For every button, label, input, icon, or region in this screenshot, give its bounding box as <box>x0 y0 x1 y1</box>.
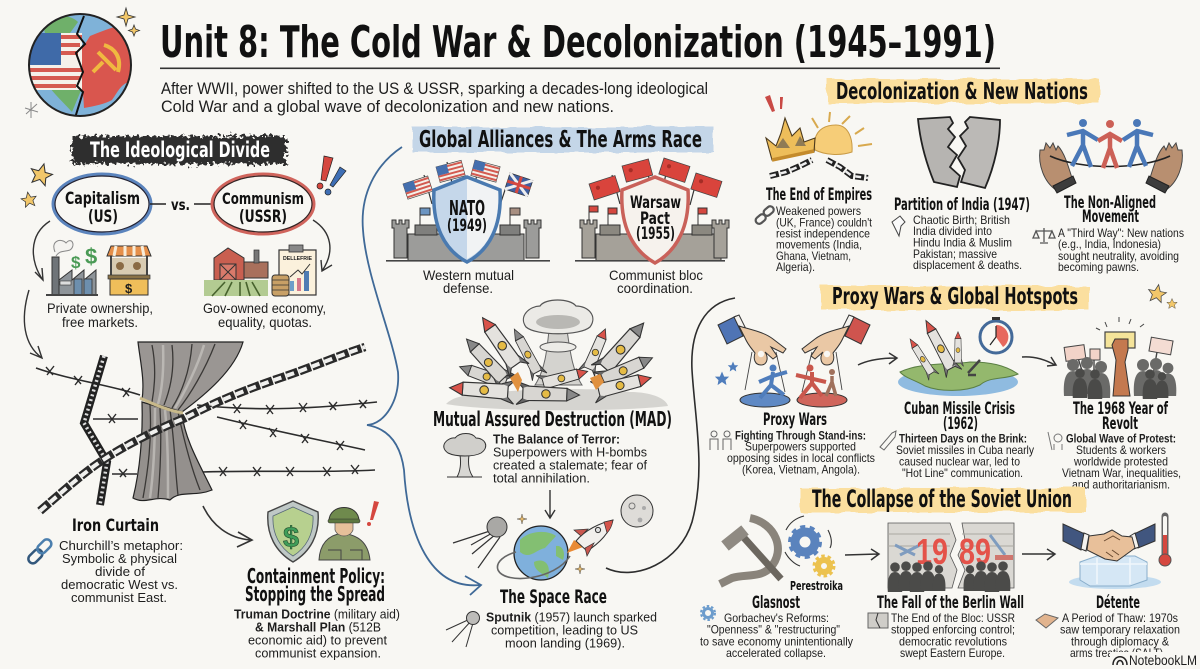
glasnost text: "Openness" & "restructuring" <box>707 622 840 636</box>
capitalism description <box>47 300 153 330</box>
partition text: displacement & deaths. <box>913 258 1022 272</box>
detente text: through diplomacy & <box>1071 634 1169 648</box>
icon: market stall: $ <box>125 281 133 296</box>
MAD text <box>493 432 647 486</box>
heading: MAD: Mutual Assured Destruction (MAD) <box>433 407 672 431</box>
icon: shield with dollar: $ <box>283 522 299 554</box>
containment text: economic aid) to prevent <box>248 632 387 648</box>
MAD text: The Balance of Terror: <box>493 432 620 446</box>
end of empires text: Weakened powers <box>776 204 861 218</box>
arrow: black brace to proxy wars and space race <box>606 298 735 572</box>
illustration: hammer and sickle <box>720 518 781 584</box>
capitalism oval: Capitalism <box>65 189 140 209</box>
icon: mushroom cloud <box>444 434 486 477</box>
icon: shield with dollar <box>268 501 318 562</box>
communism description <box>203 300 326 330</box>
panel: the ideological divide <box>20 136 346 358</box>
partition text: India divided into <box>913 224 992 238</box>
heading: end of empires: The End of Empires <box>766 185 872 205</box>
containment text <box>234 606 400 660</box>
cuban missile text: "Hot Line" communication. <box>902 466 1023 480</box>
communism description: equality, quotas. <box>218 314 312 330</box>
arrow head <box>237 532 252 547</box>
detente text: A Period of Thaw: 1970s <box>1062 611 1178 625</box>
heading: collapse: The Collapse of the Soviet Union <box>812 485 1072 513</box>
non-aligned text: sought neutrality, avoiding <box>1058 249 1179 263</box>
illustration: berlin wall 1989: 19 <box>916 531 948 572</box>
cuban missile text <box>896 432 1034 480</box>
warsaw pact group <box>575 158 729 296</box>
communism oval: (USSR) <box>239 207 287 227</box>
icon: clipboard chart and coins <box>272 245 316 296</box>
panel: global alliances and arms race <box>386 127 729 650</box>
end of empires text: resist independence <box>776 226 870 240</box>
illustration: end of empires <box>765 95 872 178</box>
end of empires text: (UK, France) couldn't <box>776 216 873 230</box>
heading: 1968 <box>1073 399 1168 434</box>
detente text: arms treaties (SALT). <box>1070 646 1166 660</box>
nato group <box>386 160 550 296</box>
non-aligned text <box>1058 226 1184 274</box>
earth <box>497 526 570 580</box>
shield: nato: (1949) <box>447 216 487 236</box>
MAD text: total annihilation. <box>493 470 590 486</box>
castle: nato <box>386 208 550 262</box>
panel: collapse of the soviet union <box>700 485 1180 660</box>
1968 text: worldwide protested <box>1073 454 1168 468</box>
versus label: vs. <box>171 196 190 214</box>
heading: berlin wall: The Fall of the Berlin Wall <box>877 593 1024 613</box>
icon: stars <box>1147 283 1177 308</box>
iron curtain text: Symbolic & physical <box>62 551 177 566</box>
illustration: 1968 protest <box>1064 317 1176 399</box>
1968 text: Global Wave of Protest: <box>1066 432 1176 446</box>
heading: decolonization: Decolonization & New Nations <box>836 79 1088 105</box>
icon: handshake <box>1036 614 1058 628</box>
label: perestroika: Perestroika <box>790 579 843 593</box>
icon: split globe <box>25 8 140 118</box>
berlin wall text: democratic revolutions <box>899 634 1007 648</box>
partition text: Chaotic Birth; British <box>913 213 1010 227</box>
icon: broken chain <box>754 205 775 225</box>
heading: 1968: Revolt <box>1102 414 1138 434</box>
space race text: competition, leading to US <box>491 622 638 638</box>
arrow: cuba to 1968 <box>1022 357 1056 366</box>
icon: scales <box>1033 228 1055 243</box>
icon: market stall <box>107 246 151 296</box>
heading: containment policy: Stopping the Spread <box>245 582 385 606</box>
fence post <box>84 356 107 505</box>
iron curtain text: democratic West vs. <box>61 577 178 592</box>
partition text: Hindu India & Muslim <box>913 236 1012 250</box>
heading: partition of india: Partition of India (1947) <box>894 195 1030 215</box>
shield: warsaw pact: Pact <box>640 209 670 229</box>
space race text: Sputnik (1957) launch sparked <box>486 610 657 624</box>
arrow head <box>30 346 42 358</box>
heading: iron curtain: Iron Curtain <box>72 516 159 536</box>
1968 text <box>1062 432 1181 492</box>
proxy wars text: Fighting Through Stand-ins: <box>735 428 866 442</box>
intro text <box>161 80 708 116</box>
nato description: Western mutual <box>423 267 514 283</box>
icon: gear <box>701 606 715 620</box>
partition text: Pakistan; massive <box>913 247 997 261</box>
heading: cuban missile crisis <box>904 399 1015 434</box>
proxy wars text: Superpowers supported <box>745 440 856 454</box>
heading: containment policy: Containment Policy: <box>247 564 385 588</box>
heading: non-aligned movement: Movement <box>1082 207 1139 227</box>
rocket <box>567 520 613 556</box>
nato description: defense. <box>443 280 493 296</box>
arrow head <box>35 268 43 280</box>
panel: containment policy <box>234 501 400 660</box>
warsaw pact description <box>609 267 703 296</box>
detente text <box>1060 611 1180 660</box>
panel: iron curtain <box>27 342 377 605</box>
icon: india map <box>892 216 905 236</box>
badge: notebooklm <box>1110 652 1200 669</box>
capitalism oval: (US) <box>88 207 118 227</box>
partition text <box>913 213 1022 272</box>
icon: barn and field <box>204 248 268 296</box>
heading: cuban missile crisis: (1962) <box>943 414 978 434</box>
illustration: berlin wall 1989: 89 <box>959 531 991 572</box>
glasnost text: accelerated collapse. <box>726 646 826 660</box>
illustration: non-aligned movement <box>1040 119 1182 193</box>
icon: exclamation marks <box>317 156 346 195</box>
1968 text: Students & workers <box>1076 443 1166 457</box>
heading: collapse <box>800 485 1086 513</box>
capitalism oval <box>53 174 151 234</box>
non-aligned text: becoming pawns. <box>1058 260 1139 274</box>
space race text: moon landing (1969). <box>505 636 625 650</box>
panel: decolonization and new nations <box>754 79 1184 274</box>
communism oval <box>212 174 314 234</box>
containment text: communist expansion. <box>255 646 381 660</box>
icon: factory and dollars <box>46 240 98 296</box>
icon: chain link <box>27 538 53 565</box>
sparkles <box>517 514 585 574</box>
heading: glasnost: Glasnost <box>752 593 800 613</box>
end of empires text: Ghana, Vietnam, <box>776 249 851 263</box>
panel: proxy wars and global hotspots <box>710 283 1181 492</box>
glasnost text: Gorbachev's Reforms: <box>724 611 829 625</box>
icon: stand-ins <box>710 431 731 450</box>
heading: proxy wars item: Proxy Wars <box>763 410 827 430</box>
arrow: ideology to iron curtain <box>24 290 42 358</box>
berlin wall text: The End of the Bloc: USSR <box>891 611 1015 625</box>
end of empires text <box>776 204 873 274</box>
heading: proxy wars: Proxy Wars & Global Hotspots <box>832 284 1078 310</box>
heading: detente: Détente <box>1096 593 1140 613</box>
proxy wars text: (Korea, Vietnam, Angola). <box>742 462 860 476</box>
glasnost text <box>700 611 853 660</box>
berlin wall text: stopped enforcing control; <box>891 622 1015 636</box>
arrow: blue brace to alliances and space race <box>363 147 480 585</box>
1968 text: Vietnam War, inequalities, <box>1062 466 1181 480</box>
containment text: & Marshall Plan (512B <box>255 620 381 634</box>
moon <box>621 495 653 527</box>
arrow: curtain to containment <box>203 506 250 540</box>
heading: global alliances: Global Alliances & The Arms Race <box>419 127 702 153</box>
end of empires text: movements (India, <box>776 238 862 252</box>
icon: stars <box>20 161 55 208</box>
containment text: Truman Doctrine (military aid) <box>234 606 400 622</box>
icon: factory and dollars: $ <box>85 244 97 269</box>
heading: cuban missile crisis: Cuban Missile Crisis <box>904 399 1015 419</box>
heading: ideological divide <box>72 136 286 164</box>
intro text: After WWII, power shifted to the US & USSR, sparking a decades-long ideological <box>161 80 708 98</box>
cuban missile text: caused nuclear war, led to <box>899 454 1020 468</box>
capitalism description: Private ownership, <box>47 300 153 316</box>
illustration: missiles and mushroom cloud <box>446 300 668 410</box>
illustration: partition of india <box>918 117 1000 188</box>
warsaw pact description: coordination. <box>617 280 693 296</box>
icon: factory and dollars: $ <box>71 253 81 272</box>
intro text: Cold War and a global wave of decolonization and new nations. <box>161 98 614 116</box>
title underline <box>160 68 1000 69</box>
arrow head <box>465 576 481 595</box>
illustration: handshake on ice <box>1063 516 1171 589</box>
shield: nato: NATO <box>449 196 485 220</box>
shield: nato <box>434 177 500 262</box>
detente text: saw temporary relaxation <box>1060 622 1180 636</box>
icon: cracked wall <box>868 613 888 628</box>
illustration: cuban missile crisis <box>898 316 1018 396</box>
berlin wall text <box>891 611 1015 660</box>
end of empires text: Algeria). <box>776 260 815 274</box>
curtain <box>133 342 243 501</box>
cuban missile text: Thirteen Days on the Brink: <box>899 432 1027 446</box>
MAD text: created a stalemate; fear of <box>493 458 647 472</box>
arrow: communism to economy <box>313 220 330 271</box>
icon: red exclamation <box>367 501 379 526</box>
arrow: MAD to space race <box>545 490 555 518</box>
shield: warsaw pact: (1955) <box>636 224 675 244</box>
arrow head <box>321 260 332 271</box>
flags: nato <box>403 160 533 205</box>
illustration: berlin wall 1989 <box>888 523 1014 592</box>
iron curtain text <box>59 538 183 605</box>
warsaw pact description: Communist bloc <box>609 267 703 283</box>
glasnost text: to save economy unintentionally <box>700 634 853 648</box>
communism description: Gov-owned economy, <box>203 300 326 316</box>
arrow: berlin wall to detente <box>1022 549 1055 560</box>
proxy wars text: opposing sides in local conflicts <box>727 451 875 465</box>
icon: small sputnik <box>446 612 480 647</box>
icon: protest <box>1048 432 1062 450</box>
icon: clipboard chart and coins: DELLEFRIE <box>283 256 313 262</box>
iron curtain text: divide of <box>95 564 145 579</box>
versus label <box>150 196 212 214</box>
barbed wire <box>36 366 377 477</box>
communism oval: Communism <box>222 189 304 208</box>
space race text <box>486 610 657 650</box>
shield: warsaw pact <box>622 177 688 263</box>
capitalism description: free markets. <box>62 314 138 330</box>
heading: ideological divide: The Ideological Divide <box>90 138 270 162</box>
icon: gears perestroika <box>785 516 834 576</box>
nato description <box>423 267 514 296</box>
arrow: glasnost to berlin wall <box>845 549 879 560</box>
chain <box>40 347 365 511</box>
icon: soldier <box>319 508 370 560</box>
iron curtain text: Churchill’s metaphor: <box>59 538 183 553</box>
arrow: capitalism to economy <box>33 221 50 280</box>
flags: warsaw pact <box>589 158 722 205</box>
castle: warsaw pact <box>575 206 729 262</box>
cuban missile text: Soviet missiles in Cuba nearly <box>896 443 1034 457</box>
berlin wall text: swept Eastern Europe. <box>900 646 1005 660</box>
arrow: proxy wars to cuba <box>858 353 897 365</box>
heading: non-aligned movement <box>1064 193 1156 227</box>
heading: space race: The Space Race <box>500 586 607 608</box>
1968 text: and authoritarianism. <box>1072 478 1170 492</box>
iron curtain text: communist East. <box>71 590 167 605</box>
non-aligned text: (e.g., India, Indonesia) <box>1058 237 1161 251</box>
MAD text: Superpowers with H-bombs <box>493 444 647 460</box>
sputnik large <box>453 517 507 568</box>
proxy wars text <box>727 428 875 476</box>
shield: warsaw pact: Warsaw <box>630 193 681 213</box>
heading: containment policy <box>245 564 385 606</box>
icon: missile outline <box>880 431 896 450</box>
illustration: space race <box>453 495 653 580</box>
illustration: puppet master hands <box>715 315 870 407</box>
non-aligned text: A "Third Way": New nations <box>1058 226 1184 240</box>
